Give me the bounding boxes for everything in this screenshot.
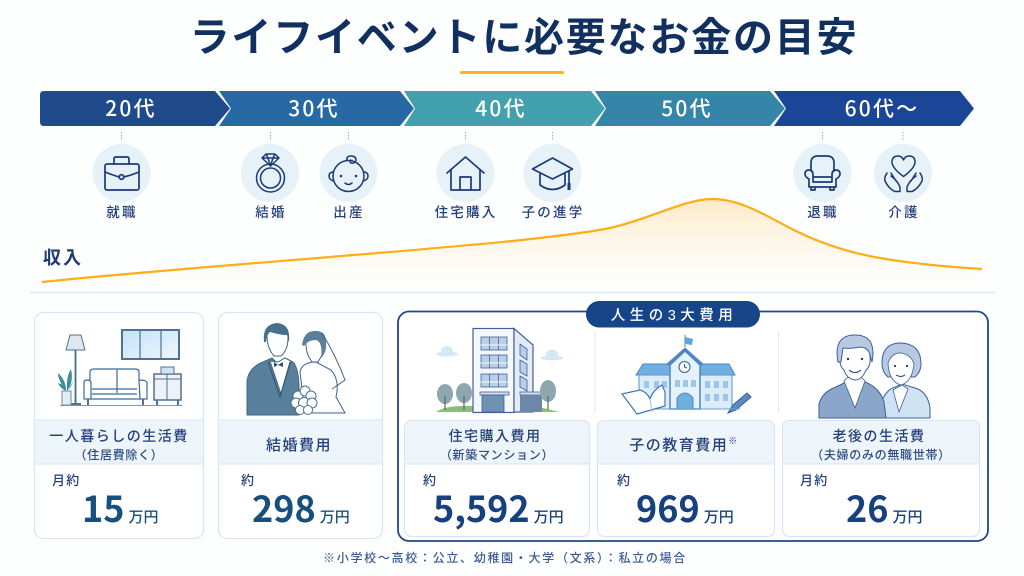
life event: 出産 bbox=[320, 132, 378, 220]
footnote: ※小学校〜高校：公立、幼稚園・大学（文系）：私立の場合 bbox=[323, 550, 687, 565]
age 40s chevron: 40代 bbox=[475, 93, 527, 123]
life event: 退職: 退職 bbox=[807, 205, 839, 220]
age 30s chevron bbox=[219, 91, 414, 126]
column: 子の教育費用: 子の教育費用 bbox=[629, 437, 728, 454]
age 60s chevron bbox=[774, 91, 974, 126]
card: 結婚費用: 結婚費用 bbox=[266, 437, 332, 454]
icon: graduation cap bbox=[532, 158, 572, 190]
card: 一人暮らしの生活費: 一人暮らしの生活費 bbox=[49, 428, 189, 444]
life event: 住宅購入 bbox=[435, 132, 497, 220]
column: 子の教育費用 bbox=[598, 420, 774, 536]
icon: heart and hands bbox=[885, 156, 922, 192]
life event: 介護: 介護 bbox=[888, 205, 920, 220]
badge: 人生の3大費用 bbox=[586, 301, 760, 328]
column: 住宅購入費用 bbox=[404, 420, 590, 536]
age 50s chevron: 50代 bbox=[661, 93, 713, 123]
column: 老後の生活費: （夫婦のみの無職世帯） bbox=[811, 447, 951, 462]
age 20s chevron bbox=[40, 91, 230, 126]
title underline bbox=[460, 71, 564, 74]
column: 老後の生活費: 26 万円 bbox=[846, 481, 922, 533]
column: 老後の生活費 bbox=[782, 420, 980, 536]
amount: 月約 bbox=[52, 473, 80, 488]
life event: 子の進学 bbox=[522, 132, 584, 220]
life event: 住宅購入: 住宅購入 bbox=[435, 204, 497, 220]
amount: 約 bbox=[241, 473, 255, 488]
income curve chart bbox=[42, 199, 982, 290]
column: 住宅購入費用: 住宅購入費用 bbox=[448, 428, 542, 444]
panel: 人生の3大費用 bbox=[398, 301, 988, 541]
badge: 人生の3大費用: 人生の3大費用 bbox=[611, 307, 737, 324]
card: 結婚費用 bbox=[218, 312, 382, 538]
life event: 退職 bbox=[794, 132, 852, 220]
life event: 就職 bbox=[92, 132, 150, 220]
life event: 結婚: 結婚 bbox=[255, 205, 287, 220]
age timeline bbox=[40, 91, 974, 126]
card title band bbox=[219, 420, 382, 464]
column: 子の教育費用: ※ bbox=[728, 436, 739, 446]
card: 一人暮らしの生活費: （住居費除く） bbox=[75, 447, 163, 462]
age 20s chevron: 20代 bbox=[105, 93, 157, 123]
life event: 子の進学: 子の進学 bbox=[522, 205, 584, 220]
illustration: apartment building bbox=[436, 328, 563, 412]
card: 一人暮らしの生活費 bbox=[34, 312, 204, 538]
illustration: bride and groom bbox=[247, 323, 345, 415]
card: 一人暮らしの生活費: 15 万円 bbox=[82, 481, 158, 533]
age 30s chevron: 30代 bbox=[288, 93, 340, 123]
income label: 収入 bbox=[43, 248, 83, 268]
icon: briefcase bbox=[105, 157, 139, 190]
life event: 介護 bbox=[874, 132, 932, 220]
illustration: living room bbox=[58, 330, 182, 406]
column: 老後の生活費: 老後の生活費 bbox=[832, 428, 926, 444]
illustration: school bbox=[622, 335, 751, 414]
income line bbox=[42, 199, 982, 282]
area under curve bbox=[42, 199, 982, 290]
icon: armchair bbox=[805, 156, 840, 190]
icon: baby face bbox=[329, 156, 368, 192]
column: 住宅購入費用: （新築マンション） bbox=[440, 447, 554, 462]
amount: 約 bbox=[617, 473, 631, 488]
amount: 約 bbox=[423, 473, 437, 488]
icon: ring bbox=[256, 154, 284, 192]
card title band bbox=[35, 420, 203, 464]
amount: 月約 bbox=[800, 473, 828, 488]
age 50s chevron bbox=[595, 91, 785, 126]
life event: 就職: 就職 bbox=[106, 205, 138, 220]
illustration: elderly couple bbox=[819, 335, 930, 418]
icon: house bbox=[447, 157, 484, 190]
column: 住宅購入費用: 5,592 万円 bbox=[433, 481, 564, 533]
card: 結婚費用: 298 万円 bbox=[252, 481, 350, 533]
age 40s chevron bbox=[404, 91, 605, 126]
column: 子の教育費用: 969 万円 bbox=[636, 481, 734, 533]
title: ライフイベントに必要なお金の目安 bbox=[190, 16, 858, 60]
age 60s chevron: 60代〜 bbox=[845, 93, 919, 123]
life event: 出産: 出産 bbox=[333, 204, 365, 220]
life event: 結婚 bbox=[241, 132, 299, 220]
